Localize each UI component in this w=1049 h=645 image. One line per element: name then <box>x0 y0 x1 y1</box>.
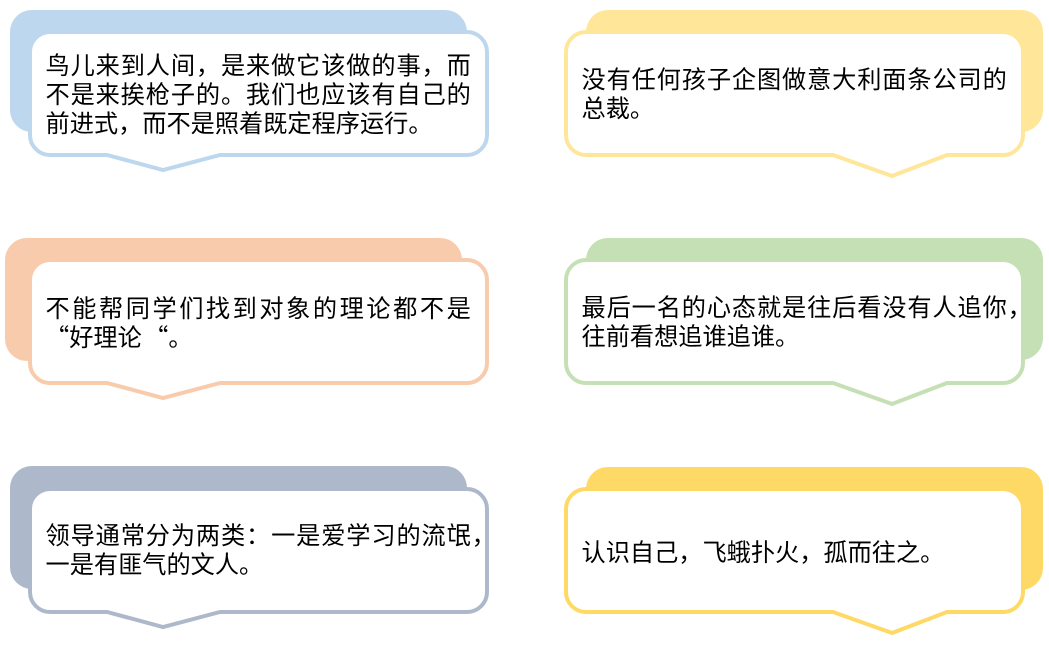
backing card: green <box>586 238 1043 360</box>
text: bird quote: 不是来挨枪子的。我们也应该有自己的 <box>46 75 472 110</box>
backing card: yellow <box>586 10 1043 132</box>
text: bird quote: 前进式，而不是照着既定程序运行。 <box>46 104 433 139</box>
speech bubble: peach outline <box>30 260 487 398</box>
text: theory quote <box>45 289 473 353</box>
speech bubble: yellow outline <box>566 32 1023 176</box>
text: leaders quote: 一是有匪气的文人。 <box>46 545 263 580</box>
text: last place quote <box>582 288 1033 352</box>
text: leaders quote <box>46 516 497 580</box>
text: last place quote: 最后一名的心态就是往后看没有人追你， <box>582 288 1033 323</box>
panel: know yourself quote <box>566 467 1043 633</box>
speech bubble: slate outline <box>30 489 487 627</box>
panel: last place quote <box>566 238 1043 404</box>
text: leaders quote: 领导通常分为两类：一是爱学习的流氓， <box>46 516 497 551</box>
text: bird quote: 鸟儿来到人间，是来做它该做的事，而 <box>46 46 472 81</box>
backing card: peach <box>5 238 462 361</box>
panel: leaders quote <box>10 466 497 627</box>
panel: CEO quote <box>566 10 1043 176</box>
text: last place quote: 往前看想追谁追谁。 <box>582 317 799 352</box>
panel: bird quote <box>10 10 487 170</box>
speech bubble: gold outline <box>566 489 1023 633</box>
backing card: slate <box>10 466 467 589</box>
text: theory quote: 不能帮同学们找到对象的理论都不是 <box>46 289 473 324</box>
text: CEO quote <box>582 60 1008 124</box>
backing card: blue <box>10 10 467 132</box>
speech bubble: green outline <box>566 260 1023 404</box>
panel: theory quote <box>5 238 487 398</box>
backing card: gold <box>586 467 1043 590</box>
speech bubble: blue outline <box>30 32 487 170</box>
text: CEO quote: 没有任何孩子企图做意大利面条公司的 <box>582 60 1008 95</box>
text: bird quote <box>46 46 472 139</box>
text: theory quote: “好理论 “。 <box>45 318 193 353</box>
text: CEO quote: 总裁。 <box>582 89 654 124</box>
text: know yourself quote: 认识自己，飞蛾扑火，孤而往之。 <box>582 533 944 568</box>
